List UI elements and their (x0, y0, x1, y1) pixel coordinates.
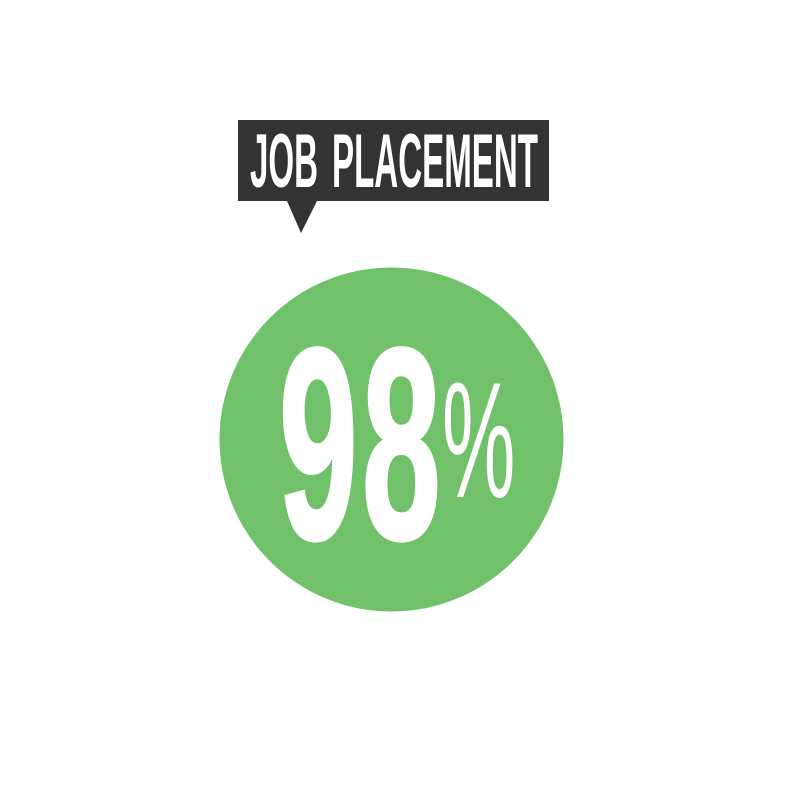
percent sign: % (442, 348, 515, 532)
number: 8: 8 (362, 292, 441, 596)
stat: 98 percent (279, 292, 515, 596)
number: 9: 9 (279, 292, 358, 596)
green circle (220, 268, 564, 612)
speech bubble shape (238, 120, 549, 233)
callout: job placement speech bubble (238, 119, 549, 233)
heading: job placement: JOB (250, 119, 318, 204)
panel: green stat circle (220, 268, 564, 612)
infographic: PLACEMENT (332, 119, 538, 204)
